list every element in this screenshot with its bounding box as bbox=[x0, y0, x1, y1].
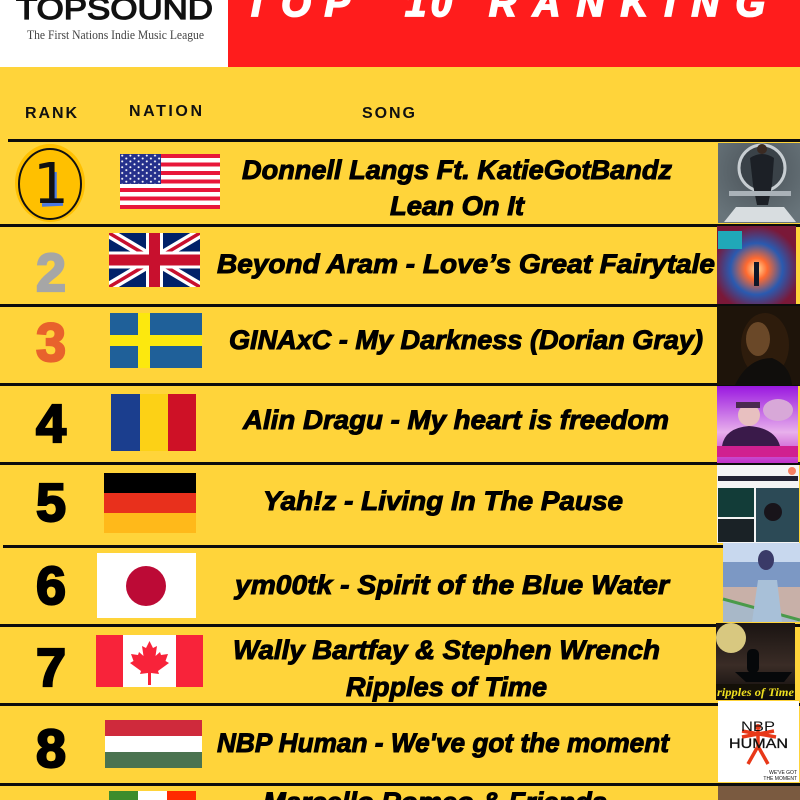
cover art 8: THE MOMENT bbox=[763, 776, 797, 782]
cover art 8: NBP bbox=[741, 718, 775, 734]
cover art 8 bbox=[718, 701, 799, 782]
header: title banner bbox=[228, 0, 800, 67]
row 2 bbox=[36, 226, 796, 304]
row 8 bbox=[36, 701, 799, 782]
flag: Romania bbox=[111, 394, 196, 451]
song title 1 bbox=[242, 155, 672, 221]
row 5 bbox=[36, 465, 799, 543]
song title 6: ym00tk - Spirit of the Blue Water bbox=[233, 570, 671, 600]
row 3 bbox=[36, 306, 800, 385]
flag: United Kingdom bbox=[109, 233, 200, 287]
header: logo panel bbox=[0, 0, 228, 67]
cover art 5 bbox=[717, 465, 799, 543]
title bbox=[245, 0, 765, 25]
rank 8: 8 bbox=[36, 719, 66, 779]
flag: Canada bbox=[96, 635, 203, 687]
logo tagline: The First Nations Indie Music League bbox=[27, 28, 204, 42]
flag: Germany bbox=[104, 473, 196, 533]
column heading: nation: NATION bbox=[129, 103, 202, 120]
row 9 bbox=[109, 786, 800, 800]
column heading: song: SONG bbox=[362, 105, 415, 122]
rank 4: 4 bbox=[36, 394, 66, 454]
cover art 6 bbox=[723, 543, 800, 622]
rank 5: 5 bbox=[36, 473, 66, 533]
cover art 8: WE'VE GOT bbox=[769, 770, 797, 776]
row 1 bbox=[15, 143, 800, 223]
song title 7: Ripples of Time bbox=[346, 672, 547, 702]
song title 3: GINAxC - My Darkness (Dorian Gray) bbox=[229, 325, 703, 355]
cover art 9 bbox=[718, 786, 800, 800]
flag: United States bbox=[120, 154, 220, 209]
row 7 bbox=[36, 623, 795, 702]
song title 7 bbox=[233, 635, 660, 702]
maple leaf bbox=[130, 641, 169, 685]
column heading: rank: RANK bbox=[25, 105, 77, 122]
flag: Sweden bbox=[110, 313, 202, 368]
rank 1 badge: 1 bbox=[33, 152, 69, 217]
flag: Japan bbox=[97, 553, 196, 618]
song title 5: Yah!z - Living In The Pause bbox=[263, 486, 623, 516]
cover art 4 bbox=[717, 386, 798, 463]
row 6 bbox=[36, 543, 800, 622]
song title 1: Lean On It bbox=[390, 191, 525, 221]
rank 2: 2 bbox=[36, 243, 66, 303]
rank 3: 3 bbox=[36, 313, 66, 373]
rank 1 badge bbox=[15, 144, 85, 222]
cover art 7: ripples of Time bbox=[717, 687, 794, 699]
cover art 7 bbox=[716, 623, 795, 700]
cover art 1 bbox=[718, 143, 800, 223]
song title 8: NBP Human - We've got the moment bbox=[217, 728, 670, 758]
song title 2: Beyond Aram - Love’s Great Fairytale bbox=[217, 249, 715, 279]
song title 4: Alin Dragu - My heart is freedom bbox=[242, 405, 669, 435]
rank 7: 7 bbox=[36, 638, 66, 698]
song title 7: Wally Bartfay & Stephen Wrench bbox=[233, 635, 660, 665]
rank 6: 6 bbox=[36, 556, 66, 616]
cover art 8: HUMAN bbox=[729, 735, 788, 751]
cover art 2 bbox=[717, 226, 796, 304]
flag: Hungary bbox=[105, 720, 202, 768]
song title 1: Donnell Langs Ft. KatieGotBandz bbox=[242, 155, 672, 185]
cover art 3 bbox=[717, 306, 800, 385]
row 4 bbox=[36, 386, 798, 463]
flag: Italy bbox=[109, 791, 196, 800]
